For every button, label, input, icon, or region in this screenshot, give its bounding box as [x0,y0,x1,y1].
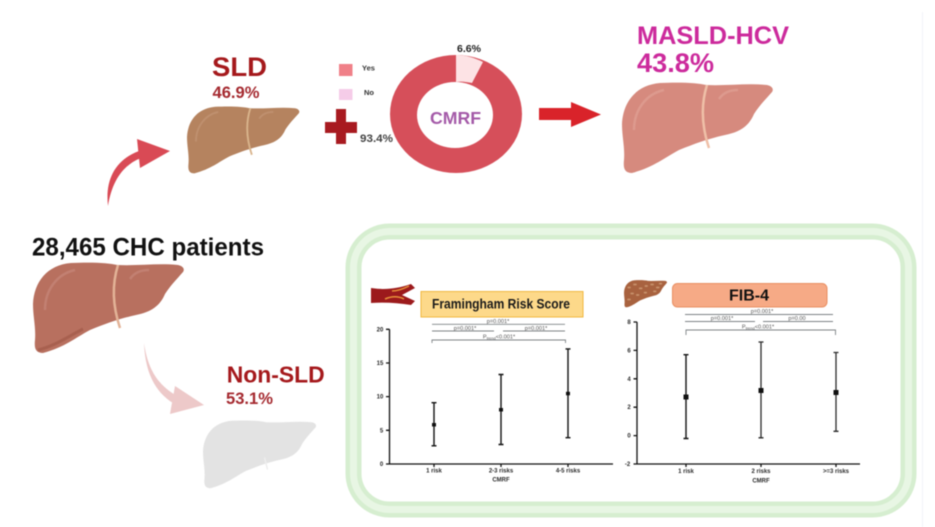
text: CMRF label: CMRF [430,108,481,128]
significance brackets: <0.001* [755,324,775,330]
significance brackets: P [742,324,746,330]
significance brackets: trend [746,326,755,330]
text: 93.4 percent: 93.4% [360,133,393,145]
significance brackets [432,319,566,343]
heading: FIB-4: FIB-4 [729,288,769,304]
icon: grey liver [203,420,316,488]
y axis labels: 10 [377,395,384,401]
error bar: 2-3 risks [498,374,504,444]
heading: Non-SLD: Non-SLD [227,362,325,388]
heading: Framingham Risk Score: Framingham Risk Score [432,296,570,312]
arrow: curved pink arrow to Non-SLD [144,343,204,414]
heading: Framingham Risk Score [421,292,583,317]
chart: CMRF donut [390,55,522,173]
x axis labels: 1 risk [426,468,442,474]
significance brackets: P [483,334,487,340]
y axis labels [377,327,384,468]
significance brackets: p=0.00 [788,316,806,322]
significance brackets: p=0.001* [711,316,734,322]
significance brackets: p=0.001* [751,309,774,315]
chart: Framingham Risk Score by CMRF [377,319,613,484]
error bar: 4-5 risks [566,349,570,438]
error bar: 1 risk [432,403,436,446]
arrow: red straight arrow [539,102,601,127]
y axis labels: 8 [627,320,631,326]
legend: CMRF yes and no: Yes [362,64,375,73]
icon: SLD liver [187,106,299,173]
icon: MASLD-HCV liver [622,83,773,173]
y axis labels: 20 [377,327,384,333]
icon: artery [371,284,415,305]
y axis labels: 4 [627,377,631,383]
icon: fibrotic liver [624,280,667,307]
icon: main liver [33,263,184,353]
heading: SLD: SLD [212,52,267,82]
y axis labels: 0 [627,434,631,440]
legend: CMRF yes and no: No [364,88,374,97]
panel: green rounded frame [354,232,908,510]
heading: MASLD-HCV: MASLD-HCV [637,22,789,50]
significance brackets: <0.001* [496,334,516,340]
significance brackets: p=0.001* [525,326,548,332]
significance brackets: p=0.001* [454,326,477,332]
chart axes [386,329,613,467]
error bar: 1 risk [684,355,688,438]
icon: plus sign [325,109,357,144]
x axis labels: CMRF [752,478,770,484]
legend: CMRF yes and no [339,64,375,100]
x axis labels [426,468,581,484]
y axis labels [625,320,631,468]
x axis labels: CMRF [492,478,510,484]
error bar: 2 risks [758,342,764,438]
significance brackets [685,309,836,335]
x axis labels: 2-3 risks [489,468,514,474]
chart axes [634,322,860,467]
arrow: curved red arrow to SLD [107,139,170,206]
y axis labels: 5 [380,428,384,434]
y axis labels: 0 [380,462,384,468]
chart: FIB-4 by CMRF [625,309,860,484]
heading: patient count: 28,465 CHC patients [32,235,264,262]
x axis labels [678,469,850,484]
significance brackets: trend [487,336,496,340]
y axis labels: -2 [625,462,631,468]
x axis labels: 4-5 risks [556,468,581,474]
text: SLD percentage: 46.9% [212,83,260,102]
y axis labels: 15 [377,361,384,367]
y axis labels: 6 [627,348,631,354]
significance brackets: p=0.001* [487,319,510,325]
text: MASLD-HCV percentage: 43.8% [637,48,714,78]
heading: FIB-4 [672,284,827,307]
x axis labels: >=3 risks [823,469,850,475]
text: 6.6 percent: 6.6% [457,43,482,55]
text: Non-SLD percentage: 53.1% [226,389,273,408]
error bar: 3 or more risks [834,352,838,431]
y axis labels: 2 [627,405,631,411]
x axis labels: 1 risk [678,469,694,475]
x axis labels: 2 risks [751,469,771,475]
